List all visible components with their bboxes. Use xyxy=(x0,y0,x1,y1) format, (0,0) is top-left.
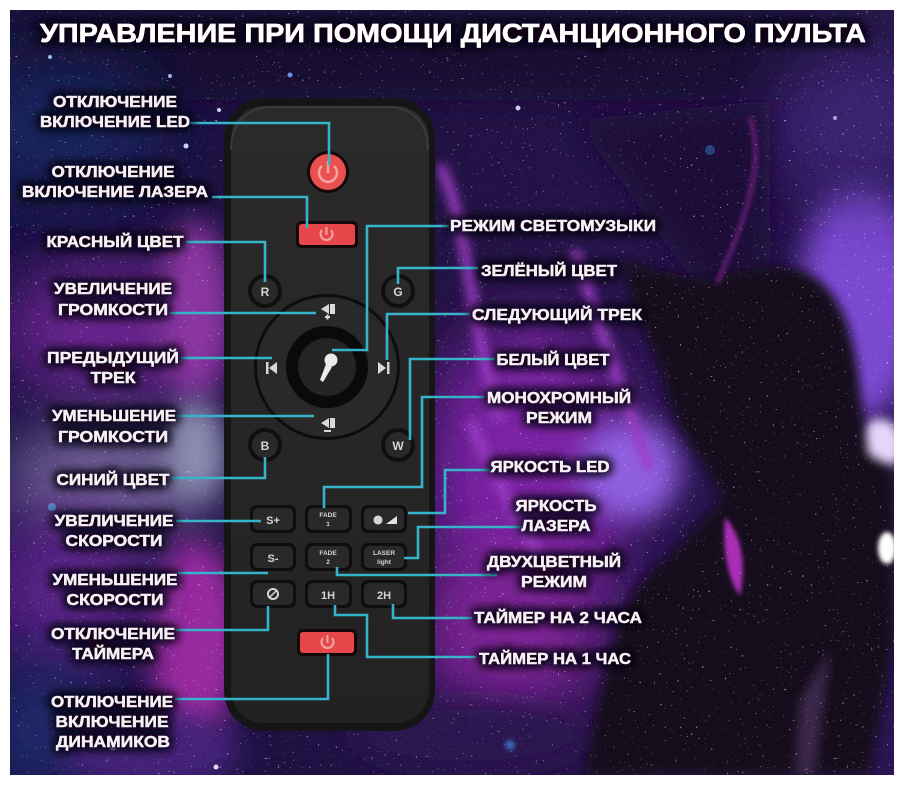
label: timer off: ТАЙМЕРА xyxy=(72,644,154,663)
connector lines xyxy=(170,123,522,699)
label: monochrome mode: РЕЖИМ xyxy=(526,410,592,427)
button: FADE 1: 1 xyxy=(326,521,330,528)
button: S-: S- xyxy=(268,553,279,565)
label: previous track xyxy=(47,348,179,387)
label: laser brightness: ЛАЗЕРА xyxy=(522,518,591,535)
label: speakers on/off xyxy=(51,694,173,751)
label: volume down: УМЕНЬШЕНИЕ xyxy=(52,408,176,425)
button: LED brightness xyxy=(361,505,407,533)
label: speed down: УМЕНЬШЕНИЕ xyxy=(52,572,178,589)
label: white colour: БЕЛЫЙ ЦВЕТ xyxy=(496,350,610,369)
button: FADE 1: FADE xyxy=(319,512,337,519)
button: B xyxy=(248,428,282,462)
label: laser brightness: ЯРКОСТЬ xyxy=(516,498,596,515)
label: LED on/off xyxy=(40,94,190,131)
label: two-colour mode: РЕЖИМ xyxy=(521,574,587,591)
button: W: W xyxy=(392,439,404,453)
title: УПРАВЛЕНИЕ ПРИ ПОМОЩИ ДИСТАНЦИОННОГО ПУЛЬТА xyxy=(40,18,866,48)
icon: laser power button xyxy=(296,221,358,248)
button: 2H xyxy=(361,580,407,608)
label: 2 hour timer: ТАЙМЕР НА 2 ЧАСА xyxy=(474,608,642,627)
button: S- xyxy=(250,543,296,571)
button: LASER light xyxy=(361,543,407,571)
button: LASER light: LASER xyxy=(373,550,395,557)
label: monochrome mode: МОНОХРОМНЫЙ xyxy=(487,388,631,407)
icon: LED power button xyxy=(307,151,349,193)
label: blue colour: СИНИЙ ЦВЕТ xyxy=(56,470,170,489)
label: laser brightness xyxy=(516,498,596,535)
label: speed down xyxy=(52,572,178,609)
label: previous track: ПРЕДЫДУЩИЙ xyxy=(47,348,179,367)
button: S+ xyxy=(250,505,296,533)
icon: microphone xyxy=(320,354,338,382)
label: laser on/off: ВКЛЮЧЕНИЕ ЛАЗЕРА xyxy=(22,184,208,201)
button: G: G xyxy=(393,285,403,299)
button: B: B xyxy=(261,439,270,453)
icon: next track xyxy=(378,362,390,374)
label: speakers on/off: ОТКЛЮЧЕНИЕ xyxy=(51,694,173,711)
label: red colour: КРАСНЫЙ ЦВЕТ xyxy=(46,232,184,251)
label: two-colour mode xyxy=(487,552,621,591)
label: speakers on/off: ВКЛЮЧЕНИЕ xyxy=(56,714,169,731)
button: R: R xyxy=(261,285,270,299)
button: W xyxy=(381,428,415,462)
icon: previous track xyxy=(266,362,277,374)
label: green colour: ЗЕЛЁНЫЙ ЦВЕТ xyxy=(481,261,617,280)
label: speed up: СКОРОСТИ xyxy=(66,533,162,550)
label: timer off: ОТКЛЮЧЕНИЕ xyxy=(51,626,175,643)
button: FADE 2: FADE xyxy=(319,550,337,557)
label: volume up: ГРОМКОСТИ xyxy=(58,302,168,319)
remote body xyxy=(224,98,435,731)
panel: remote control xyxy=(224,98,435,731)
label: volume up xyxy=(54,281,172,319)
icon: volume up xyxy=(321,304,335,320)
button: 1H xyxy=(305,580,352,608)
button: S+: S+ xyxy=(266,515,280,527)
button: R xyxy=(248,274,282,308)
label: LED on/off: ВКЛЮЧЕНИЕ LED xyxy=(40,114,190,131)
label: 1 hour timer: ТАЙМЕР НА 1 ЧАС xyxy=(479,649,631,668)
label: music mode: РЕЖИМ СВЕТОМУЗЫКИ xyxy=(450,218,656,235)
label: volume down xyxy=(52,408,176,446)
button: FADE 2: 2 xyxy=(326,559,330,566)
label: previous track: ТРЕК xyxy=(90,370,136,387)
button: 2H: 2H xyxy=(377,590,391,602)
label: speed up: УВЕЛИЧЕНИЕ xyxy=(54,513,174,530)
icon: speaker power button xyxy=(297,629,357,656)
label: volume up: УВЕЛИЧЕНИЕ xyxy=(54,281,172,298)
label: volume down: ГРОМКОСТИ xyxy=(58,429,168,446)
label: monochrome mode xyxy=(487,388,631,427)
label: next track: СЛЕДУЮЩИЙ ТРЕК xyxy=(472,305,642,324)
label: timer off xyxy=(51,626,175,663)
label: speed up xyxy=(54,513,174,550)
label: two-colour mode: ДВУХЦВЕТНЫЙ xyxy=(487,552,621,571)
label: laser on/off xyxy=(22,164,208,201)
button: LASER light: light xyxy=(377,559,392,566)
button: FADE 1 xyxy=(305,505,352,533)
label: speed down: СКОРОСТИ xyxy=(66,592,164,609)
button: 1H: 1H xyxy=(321,590,335,602)
button: timer off xyxy=(250,580,296,608)
label: LED brightness: ЯРКОСТЬ LED xyxy=(490,459,610,476)
control wheel xyxy=(254,294,400,440)
label: LED on/off: ОТКЛЮЧЕНИЕ xyxy=(53,94,177,111)
button: FADE 2 xyxy=(305,543,352,571)
icon: volume down xyxy=(321,418,335,432)
label: laser on/off: ОТКЛЮЧЕНИЕ xyxy=(52,164,175,181)
label: speakers on/off: ДИНАМИКОВ xyxy=(56,734,170,751)
button: G xyxy=(381,274,415,308)
